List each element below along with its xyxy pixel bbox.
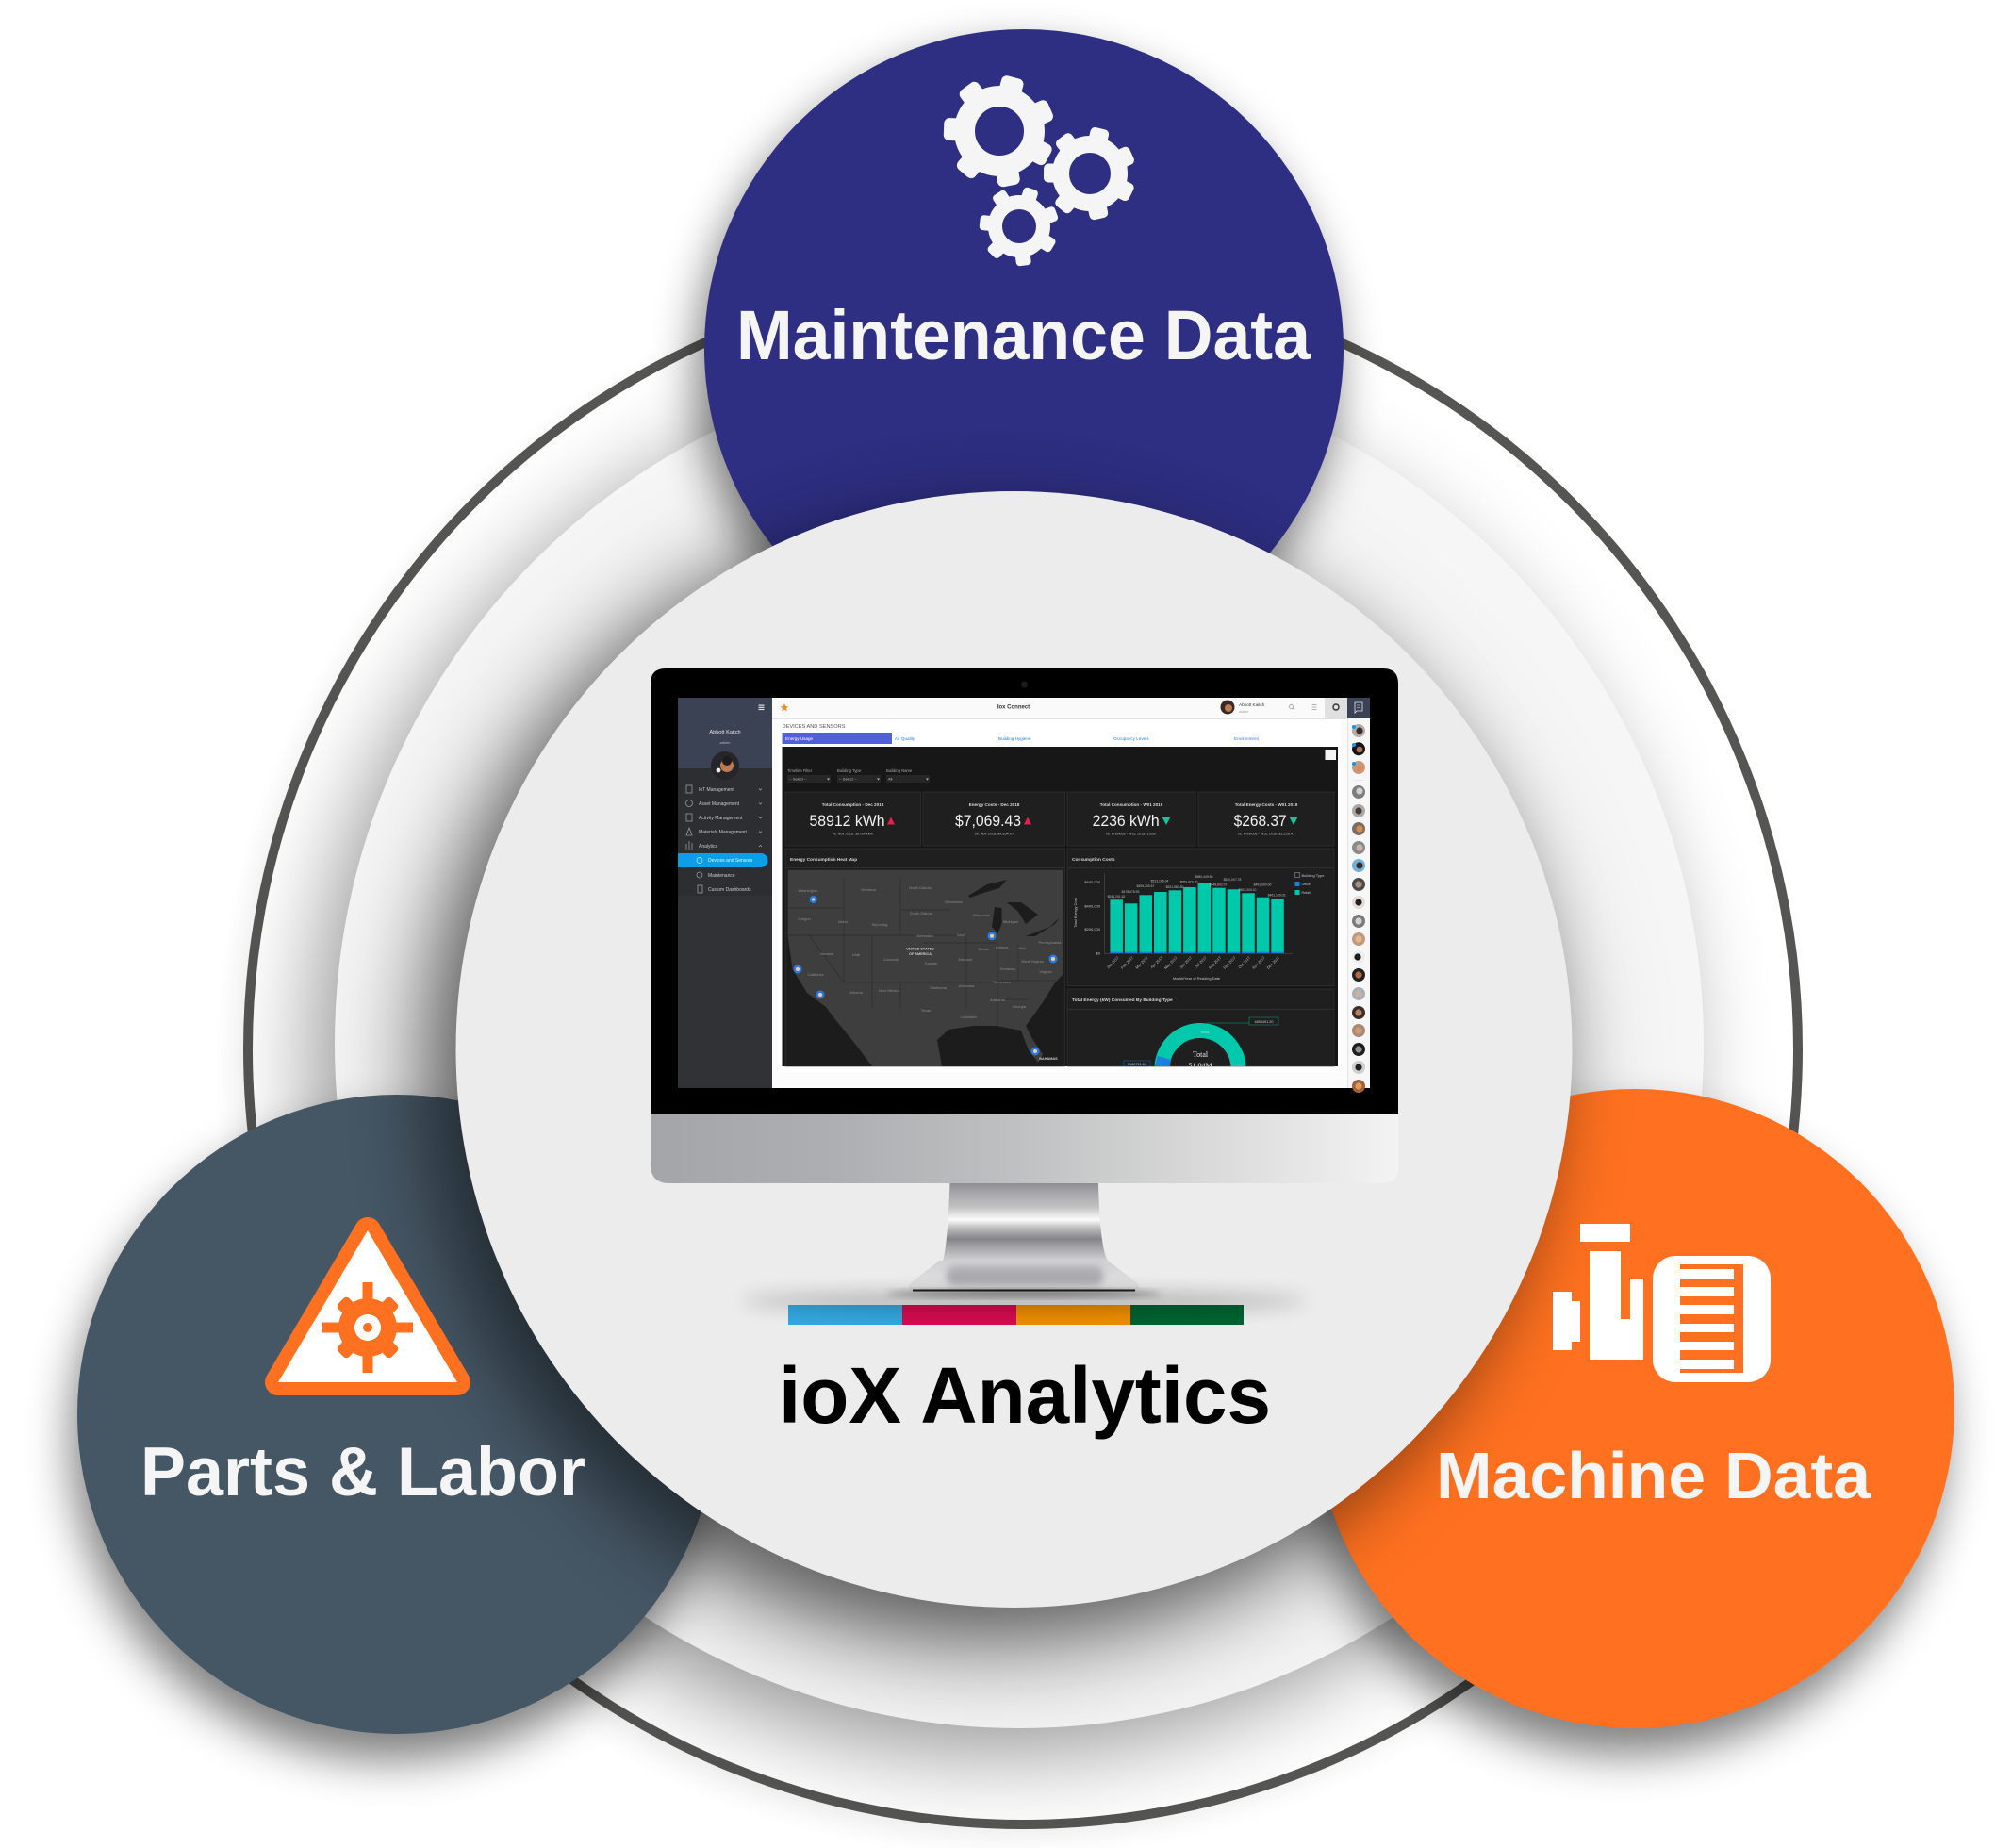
KPI cards: Total Consumption - W01 2019 xyxy=(1100,802,1163,807)
heading: maintenance data: Maintenance Data xyxy=(736,296,1311,374)
sidebar: Devices and Sensors xyxy=(708,858,753,864)
dark dashboard panel: Building Type: xyxy=(837,768,862,773)
center disc shadow xyxy=(428,513,1552,1637)
sidebar xyxy=(678,698,772,1088)
heat map panel: Georgia xyxy=(1013,1004,1027,1009)
consumption costs bar chart: Building Type xyxy=(1301,873,1325,878)
circle: machine data xyxy=(1306,1089,1954,1755)
consumption costs bar chart: Office xyxy=(1301,883,1311,886)
dark dashboard panel: -- Select -- xyxy=(839,777,857,781)
heat map panel xyxy=(785,849,1065,1066)
heat map panel: New Mexico xyxy=(879,988,900,993)
heat map panel: Washington xyxy=(799,888,817,893)
heading: parts and labor: Parts & Labor xyxy=(140,1434,585,1510)
consumption costs bar chart: Mar 2017 xyxy=(1134,955,1149,970)
consumption costs bar chart: $200,000 xyxy=(1084,927,1101,932)
chat avatars xyxy=(1347,718,1370,1093)
sidebar: Activity Management xyxy=(699,816,743,821)
consumption costs bar chart: Aug 2017 xyxy=(1208,955,1223,970)
center disc xyxy=(456,491,1573,1608)
sidebar: Materials Management xyxy=(699,830,747,835)
top bar: Abbott Kaitch xyxy=(1239,702,1265,707)
consumption costs bar chart: $491,000.00 xyxy=(1254,883,1272,886)
heat map panel: OF AMERICA xyxy=(909,952,932,956)
donut chart panel: 51.04M xyxy=(1188,1062,1212,1070)
KPI cards: 2236 kWh xyxy=(1093,812,1160,830)
heat map panel: West Virginia xyxy=(1021,959,1044,964)
heat map panel: Oklahoma xyxy=(930,985,948,990)
consumption costs bar chart: Total Energy Cost xyxy=(1073,897,1078,928)
heat map panel: Oregon xyxy=(798,916,811,921)
heat map panel: Wyoming xyxy=(872,922,887,927)
consumption costs bar chart: $502,340.10 xyxy=(1239,888,1257,892)
heat map panel: North Dakota xyxy=(909,885,932,890)
content heading and tabs: Environment xyxy=(1234,736,1260,741)
heat map panel: Arizona xyxy=(849,990,864,995)
KPI cards: Total Energy Costs - W01 2019 xyxy=(1235,802,1298,807)
icon: gears xyxy=(944,74,1136,267)
consumption costs bar chart: $531,580.80 xyxy=(1166,885,1184,889)
heat map panel: Iowa xyxy=(957,932,965,937)
monitor stand xyxy=(909,1183,1139,1292)
consumption costs bar chart: Nov 2017 xyxy=(1251,955,1266,970)
KPI cards: vs. Previous - W52 2018: 10287 xyxy=(1106,832,1157,835)
dark dashboard panel: All xyxy=(888,777,893,781)
consumption costs bar chart: Month/Year of Reading Date xyxy=(1173,976,1221,981)
heat map panel: Minnesota xyxy=(945,899,963,904)
top bar xyxy=(772,698,1370,718)
heat map panel: Idaho xyxy=(838,919,849,924)
heat map panel: Ohio xyxy=(1018,946,1027,950)
consumption costs bar chart: $553,470.20 xyxy=(1180,881,1198,884)
KPI cards: vs. Nov 2018: $4,854.07 xyxy=(975,832,1014,835)
top bar: Admin xyxy=(1239,710,1248,714)
heat map panel: South Dakota xyxy=(910,911,933,916)
heading: machine data: Machine Data xyxy=(1436,1439,1871,1512)
heat map panel: Kansas xyxy=(925,961,937,965)
content heading and tabs xyxy=(778,719,1341,1072)
heat map panel: Nebraska xyxy=(916,933,933,938)
consumption costs bar chart: May 2017 xyxy=(1163,955,1179,970)
icon: warning triangle with gear xyxy=(278,1230,457,1382)
heat map panel: Missouri xyxy=(959,957,973,962)
content heading and tabs: Occupancy Levels xyxy=(1113,736,1149,741)
consumption costs bar chart: $548,802.07 xyxy=(1210,883,1228,886)
donut chart panel: Total xyxy=(1193,1050,1209,1059)
KPI cards: Energy Costs - Dec 2018 xyxy=(969,802,1020,807)
stand shadow xyxy=(741,1291,1307,1310)
heat map panel: Energy Consumption Heat Map xyxy=(790,857,857,863)
heat map panel: Nevada xyxy=(820,951,834,956)
dark dashboard panel xyxy=(783,747,1338,1066)
top bar: Iox Connect xyxy=(998,705,1030,711)
content heading and tabs: Air Quality xyxy=(895,736,915,741)
title: ioX Analytics xyxy=(779,1351,1271,1440)
consumption costs bar chart: Jun 2017 xyxy=(1179,955,1194,969)
monitor body xyxy=(651,668,1398,1183)
KPI cards: vs. Nov 2018: 38734 kWh xyxy=(833,832,873,835)
consumption costs bar chart: Oct 2017 xyxy=(1237,955,1252,969)
donut chart panel: 4806491.20 xyxy=(1254,1020,1274,1024)
sidebar: Abbott Kaitch xyxy=(709,730,741,735)
consumption costs bar chart: $495,205.57 xyxy=(1137,884,1155,888)
heat map panel: Arkansas xyxy=(959,983,974,988)
donut chart panel: Retail xyxy=(1201,1031,1210,1034)
consumption costs bar chart: Jan 2017 xyxy=(1106,955,1120,969)
consumption costs bar chart: $600,000 xyxy=(1084,880,1101,884)
consumption costs bar chart xyxy=(1067,849,1334,986)
heat map panel: Alabama xyxy=(990,998,1006,1002)
dashboard screen xyxy=(678,698,1370,1107)
consumption costs bar chart: $0 xyxy=(1096,950,1101,956)
consumption costs bar chart: Jul 2017 xyxy=(1194,955,1208,968)
heat map panel: Pennsylvania xyxy=(1039,940,1062,945)
sidebar: Asset Management xyxy=(699,801,740,807)
heat map panel: Kentucky xyxy=(1000,966,1015,971)
consumption costs bar chart: Dec 2017 xyxy=(1266,955,1281,970)
circle: maintenance data xyxy=(697,29,1344,689)
sidebar: Custom Dashboards xyxy=(708,887,751,893)
consumption costs bar chart: Feb 2017 xyxy=(1120,955,1135,970)
heat map panel: Illinois xyxy=(978,947,989,951)
consumption costs bar chart: $478,478.93 xyxy=(1122,890,1140,894)
heat map panel: Louisiana xyxy=(960,1015,977,1019)
heat map panel: Michigan xyxy=(1003,919,1018,924)
icon: machine motor xyxy=(1553,1224,1771,1382)
consumption costs bar chart: Apr 2017 xyxy=(1149,955,1164,969)
donut chart panel: Total Energy (kW) Consumed By Building Type xyxy=(1072,998,1173,1003)
circle: parts and labor xyxy=(72,1095,717,1760)
dark dashboard panel: -- Select -- xyxy=(789,777,807,781)
consumption costs bar chart: Consumption Costs xyxy=(1072,857,1115,863)
consumption costs bar chart: $580,449.50 xyxy=(1195,875,1213,879)
heat map panel: Wisconsin xyxy=(973,913,990,917)
heat map panel: Tennessee xyxy=(993,980,1012,984)
donut chart panel: $180721.20 xyxy=(1128,1063,1146,1066)
heat map panel: BAHAMAS xyxy=(1039,1057,1058,1061)
outer ring xyxy=(235,274,1798,1840)
sidebar: Maintenance xyxy=(708,873,735,879)
sidebar: admin xyxy=(720,740,730,745)
heat map panel: Utah xyxy=(852,952,860,957)
consumption costs bar chart: $513,296.04 xyxy=(1151,879,1169,883)
sidebar: IoT Management xyxy=(699,787,734,793)
consumption costs bar chart: $400,000 xyxy=(1084,903,1101,909)
heat map panel: Colorado xyxy=(883,957,899,962)
KPI cards xyxy=(785,792,1334,846)
heat map panel: Texas xyxy=(921,1008,931,1013)
consumption costs bar chart: Retail xyxy=(1301,891,1311,895)
consumption costs bar chart: $461,150.03 xyxy=(1268,894,1286,898)
KPI cards: $268.37 xyxy=(1234,812,1287,830)
consumption costs bar chart: Sep 2017 xyxy=(1222,955,1237,970)
dark dashboard panel: Timeline Filter xyxy=(787,768,813,773)
donut chart panel xyxy=(1067,988,1335,1067)
KPI cards: Total Consumption - Dec 2018 xyxy=(822,802,884,807)
KPI cards: 58912 kWh xyxy=(809,812,884,830)
heat map panel: California xyxy=(808,972,824,977)
content heading and tabs: Building Hygiene xyxy=(998,736,1031,741)
content heading and tabs: Energy Usage xyxy=(785,736,814,741)
heat map panel: UNITED STATES xyxy=(906,947,934,950)
heat map panel: Indiana xyxy=(996,945,1009,949)
heat map panel: Montana xyxy=(861,887,877,892)
consumption costs bar chart: $541,201.62 xyxy=(1108,895,1126,899)
sidebar: Analytics xyxy=(699,844,718,850)
content heading and tabs: DEVICES AND SENSORS xyxy=(783,724,846,730)
KPI cards: vs. Previous - W52 2018: $1,228.41 xyxy=(1238,832,1294,835)
heat map panel: Virginia xyxy=(1039,969,1052,974)
KPI cards: $7,069.43 xyxy=(955,812,1021,830)
dark dashboard panel: Building Name xyxy=(886,768,913,773)
color bar xyxy=(788,1305,1244,1325)
consumption costs bar chart: $530,007.78 xyxy=(1224,878,1242,882)
inner ring disc xyxy=(315,359,1704,1752)
